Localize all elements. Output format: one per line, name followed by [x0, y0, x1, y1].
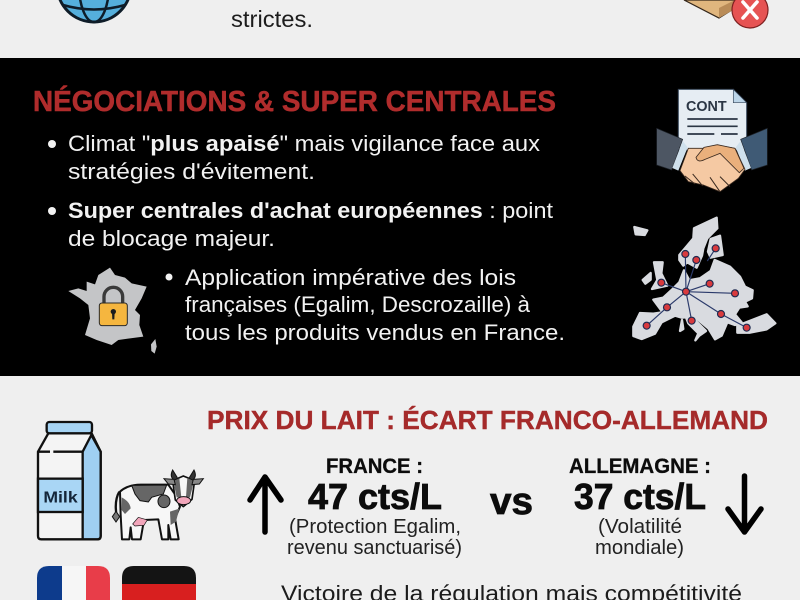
block: France price: revenu sanctuarisé)	[287, 537, 462, 559]
icon: rejected box	[684, 0, 768, 28]
block: France price	[287, 455, 462, 559]
arrow: up	[250, 477, 281, 532]
bullet text: super centrales	[48, 198, 554, 251]
panel: négociations et super centrales	[0, 58, 800, 376]
bullet text: climat	[48, 131, 541, 184]
arrow: down	[728, 476, 761, 532]
heading: négociations: NÉGOCIATIONS & SUPER CENTRALES	[33, 86, 556, 118]
icon: contract and handshake: CONT	[686, 99, 727, 115]
icon: milk carton: Milk	[43, 490, 78, 507]
bullet text: application des lois: françaises (Egalim, Descrozaille) à	[185, 292, 530, 317]
block: Germany price	[569, 455, 711, 559]
icon: France map with padlock	[68, 268, 157, 354]
bullet text: application des lois: tous les produits vendus en France.	[185, 320, 565, 345]
text: versus: vs	[490, 481, 533, 523]
bullet text: application des lois	[166, 265, 565, 345]
text: end of sentence: strictes.	[231, 6, 313, 32]
block: Germany price: ALLEMAGNE :	[569, 455, 711, 478]
icon: Europe network map	[633, 218, 775, 340]
icon: globe	[57, 0, 131, 22]
bullet text: climat: stratégies d'évitement.	[68, 159, 315, 184]
icon: French flag	[37, 566, 110, 600]
bullet text: climat: Climat "plus apaisé " mais vigilance face aux	[68, 131, 541, 156]
block: Germany price: mondiale)	[595, 537, 684, 559]
block: France price: FRANCE :	[326, 455, 423, 478]
block: France price: 47 cts/L	[308, 476, 442, 517]
icon: contract and handshake	[657, 89, 767, 192]
heading: prix du lait: PRIX DU LAIT : ÉCART FRANCO-ALLEMAND	[207, 406, 768, 435]
panel: top section	[0, 0, 800, 58]
panel: prix du lait	[0, 376, 800, 600]
block: Germany price: (Volatilité	[598, 516, 682, 538]
icon: milk carton	[38, 422, 101, 539]
block: Germany price: 37 cts/L	[574, 476, 706, 517]
icon: German flag	[122, 566, 196, 600]
block: France price: (Protection Egalim,	[289, 516, 461, 538]
bullet text: application des lois: Application impérative des lois	[185, 265, 516, 290]
bullet text: super centrales: de blocage majeur.	[68, 226, 275, 251]
icon: cow	[112, 470, 203, 539]
bullet text: super centrales: Super centrales d'achat européennes : point	[68, 198, 554, 223]
